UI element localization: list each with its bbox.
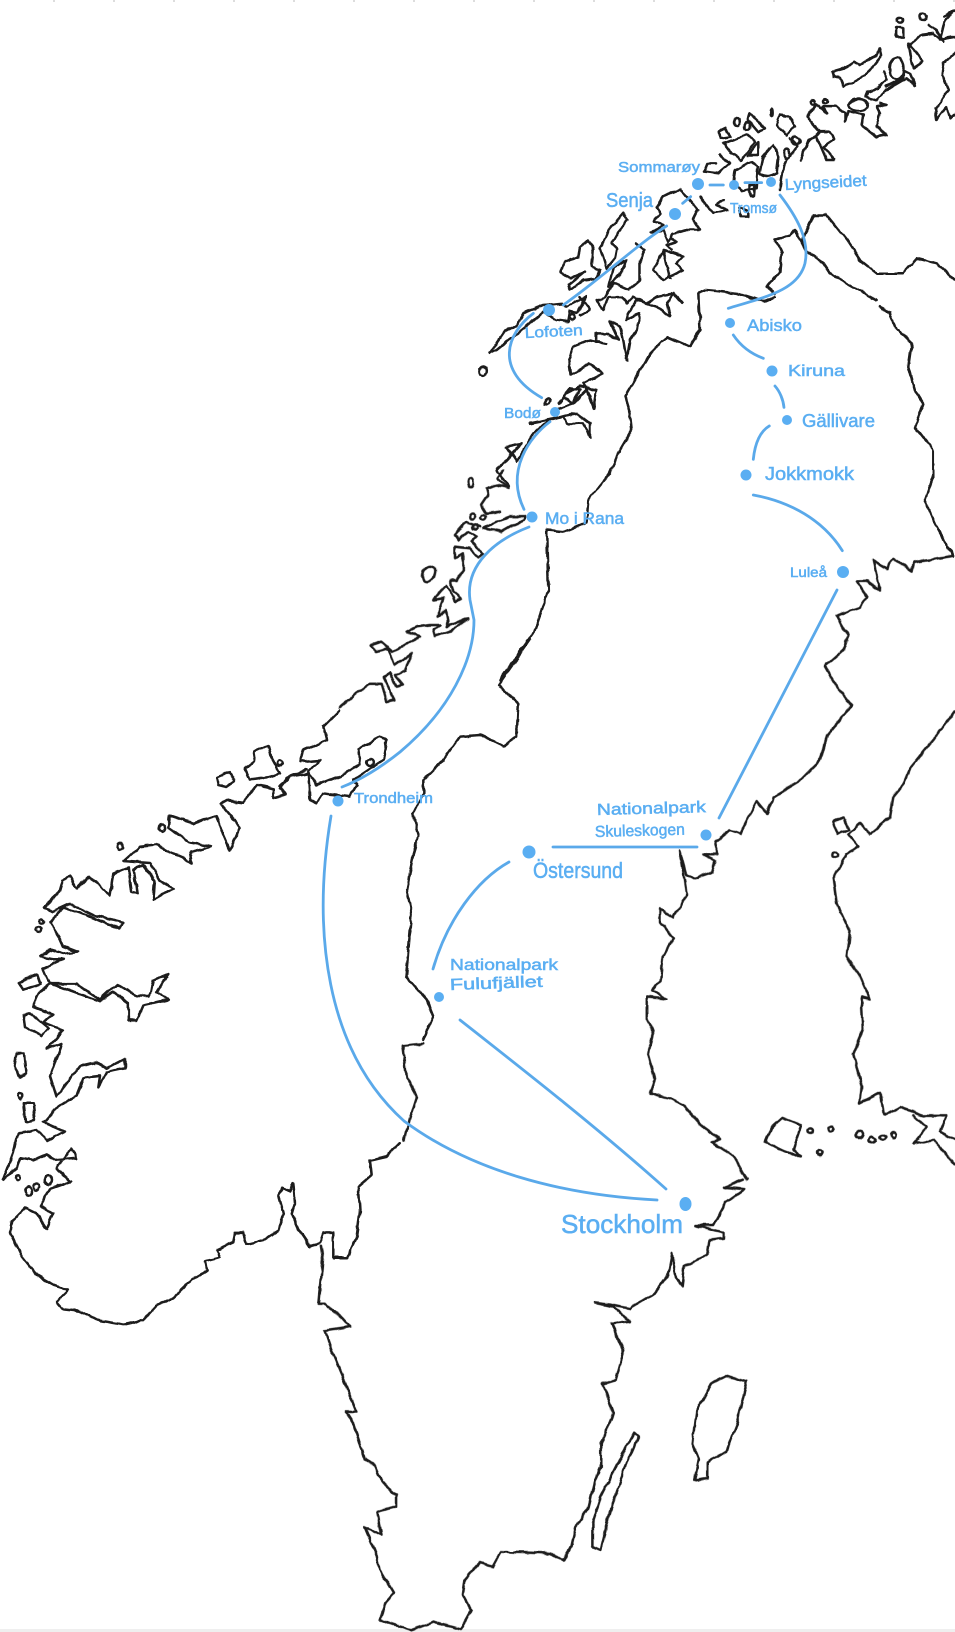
place labels: Nationalpark — [450, 957, 559, 974]
place labels: Gällivare — [802, 411, 875, 431]
place labels: Abisko — [747, 316, 802, 335]
route: Skuleskogen to Ostersund — [553, 846, 697, 848]
place labels: Tromsø — [730, 200, 777, 217]
place labels: Luleå — [790, 564, 827, 580]
route: Mo i Rana to Trondheim — [342, 527, 529, 787]
place labels: Nationalpark — [597, 799, 707, 819]
route lines — [323, 183, 842, 1200]
central Scandinavian mountain border and Trondheim coast — [280, 640, 530, 1040]
place labels: Bodø — [504, 405, 541, 422]
route: Lulea to Skuleskogen — [719, 590, 837, 818]
place labels: Kiruna — [788, 363, 845, 380]
Gulf of Bothnia coast and Finland — [647, 556, 955, 1180]
place labels: Fulufjället — [450, 974, 544, 994]
Oland — [592, 1433, 638, 1550]
Finnmark islands and fjords — [700, 10, 955, 217]
Gotland — [693, 1376, 747, 1480]
place labels: Stockholm — [561, 1209, 683, 1239]
place labels: Jokkmokk — [765, 464, 855, 484]
route: Fulufjallet to Stockholm — [460, 1020, 666, 1189]
place labels: Lofoten — [524, 322, 583, 342]
Aland — [766, 1117, 801, 1157]
Finnmark border — [767, 215, 955, 300]
place labels — [354, 159, 875, 1239]
route: Lofoten to Mo i Rana and Abisko to Lulea — [509, 313, 842, 551]
place labels: Mo i Rana — [545, 509, 625, 528]
route: Stockholm to Trondheim — [323, 816, 657, 1200]
coast south of Mo i Rana — [340, 470, 525, 707]
border continuation near Stockholm latitude — [319, 1044, 896, 1630]
place labels: Östersund — [533, 858, 623, 883]
southern Norway coast — [3, 746, 400, 1325]
place labels: Sommarøy — [618, 159, 701, 176]
Lofoten, Senja and Troms islands — [490, 190, 700, 408]
route: Lyngseidet to Abisko and Senja to Lofoten — [563, 183, 806, 308]
place labels: Lyngseidet — [784, 173, 868, 194]
route: Ostersund to Fulufjallet — [433, 862, 509, 969]
place labels: Skuleskogen — [595, 822, 685, 841]
destination dots — [332, 177, 849, 1211]
Right-hand Swedish/Finnish border — [479, 290, 953, 680]
place labels: Senja — [606, 190, 654, 212]
place labels: Trondheim — [354, 790, 433, 807]
